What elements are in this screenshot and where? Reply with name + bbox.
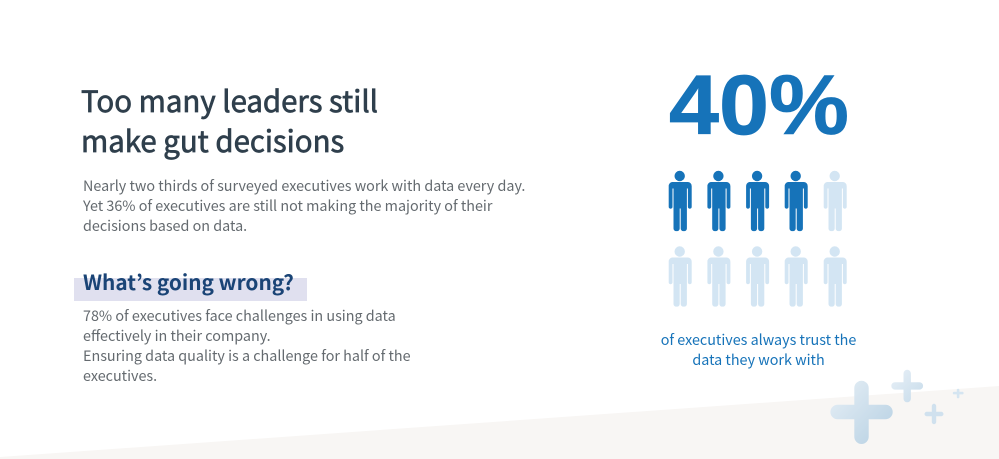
light people bbox=[669, 171, 847, 307]
challenges text bbox=[83, 305, 411, 386]
big stat: 40% bbox=[669, 58, 848, 152]
stat caption: data they work with bbox=[692, 349, 825, 370]
challenges text: effectively in their company. bbox=[83, 325, 271, 346]
challenges text: executives. bbox=[83, 365, 157, 386]
dark people bbox=[669, 171, 808, 231]
pictogram: 4 of 10 people bbox=[668, 170, 847, 307]
title: Too many leaders still bbox=[81, 79, 378, 121]
challenges text: 78% of executives face challenges in using data bbox=[83, 305, 396, 326]
intro text: Yet 36% of executives are still not making the majority of their bbox=[83, 195, 492, 216]
intro text: decisions based on data. bbox=[83, 215, 247, 236]
subheading highlight bbox=[74, 278, 307, 301]
title bbox=[81, 79, 378, 161]
stat caption: of executives always trust the bbox=[661, 329, 856, 350]
subheading: What’s going wrong? bbox=[83, 266, 294, 296]
intro text bbox=[83, 175, 525, 236]
intro text: Nearly two thirds of surveyed executives work with data every day. bbox=[83, 175, 525, 196]
challenges text: Ensuring data quality is a challenge for half of the bbox=[83, 345, 411, 366]
title: make gut decisions bbox=[81, 119, 344, 161]
icon: plus signs bbox=[830, 370, 964, 444]
stat caption bbox=[661, 329, 856, 370]
